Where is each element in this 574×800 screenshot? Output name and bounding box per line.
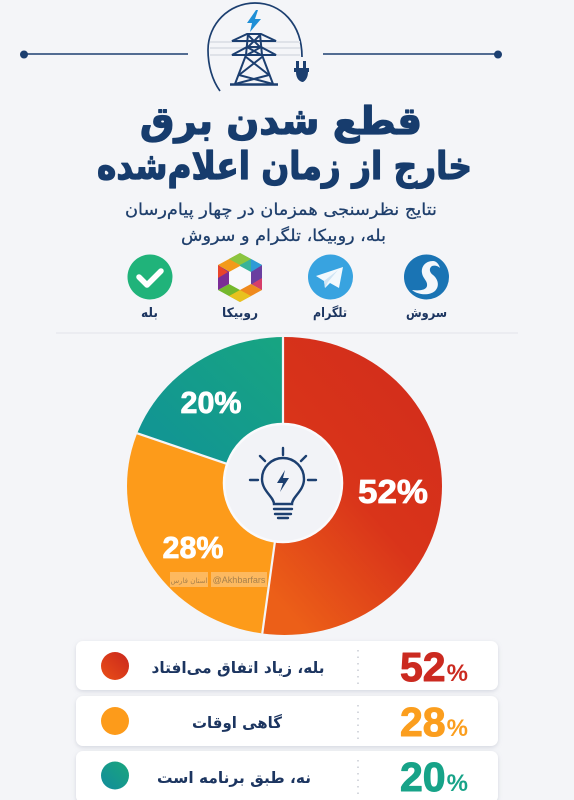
watermark: @Akhbarfars	[213, 575, 266, 585]
pie label 20%: 20%	[180, 385, 242, 420]
icon: transmission tower with bolt and plug	[208, 3, 309, 91]
pie label 52%: 52%	[358, 473, 428, 510]
label: Rubika: روبیکا	[222, 306, 258, 321]
icon: Rubika hexagon	[218, 253, 262, 302]
slice: 28% orange	[127, 433, 274, 634]
header divider line: left	[20, 51, 188, 58]
icon: Telegram	[308, 254, 353, 300]
label: Soroush: سروش	[406, 306, 447, 321]
watermark	[170, 572, 267, 587]
icon: Bale	[128, 254, 172, 300]
legend dot teal	[101, 762, 129, 790]
subtitle	[125, 200, 437, 246]
legend text: نه، طبق برنامه است	[157, 769, 311, 787]
label: Bale: بله	[141, 306, 158, 321]
title: خارج از زمان اعلام‌شده	[97, 144, 472, 189]
pie label 28%: 28%	[162, 530, 224, 565]
pie centre disc	[224, 424, 342, 542]
subtitle: بله، روبیکا، تلگرام و سروش	[181, 226, 386, 246]
legend row: 52%	[76, 641, 498, 690]
legend value: 52%	[400, 644, 468, 690]
slice: 52% red	[262, 337, 442, 635]
watermark: استان فارس	[171, 577, 207, 585]
header divider line: right	[323, 51, 502, 58]
legend text: بله، زیاد اتفاق می‌افتاد	[152, 659, 324, 677]
pie chart	[127, 337, 442, 635]
label: Telegram: تلگرام	[313, 305, 347, 321]
legend value: 20%	[400, 754, 468, 800]
title: قطع شدن برق	[140, 99, 422, 143]
legend dot red	[101, 652, 129, 680]
legend value: 28%	[400, 699, 468, 745]
legend row: 20%	[76, 751, 498, 800]
legend text: گاهی اوقات	[192, 713, 283, 732]
legend row: 28%	[76, 696, 498, 746]
legend dot orange	[101, 707, 129, 735]
icon: light bulb	[250, 448, 316, 518]
slice: 20% teal	[137, 337, 283, 462]
title	[97, 99, 472, 189]
icon: Soroush	[404, 254, 449, 300]
subtitle: نتایج نظرسنجی همزمان در چهار پیام‌رسان	[125, 200, 437, 220]
divider above chart	[56, 332, 518, 334]
